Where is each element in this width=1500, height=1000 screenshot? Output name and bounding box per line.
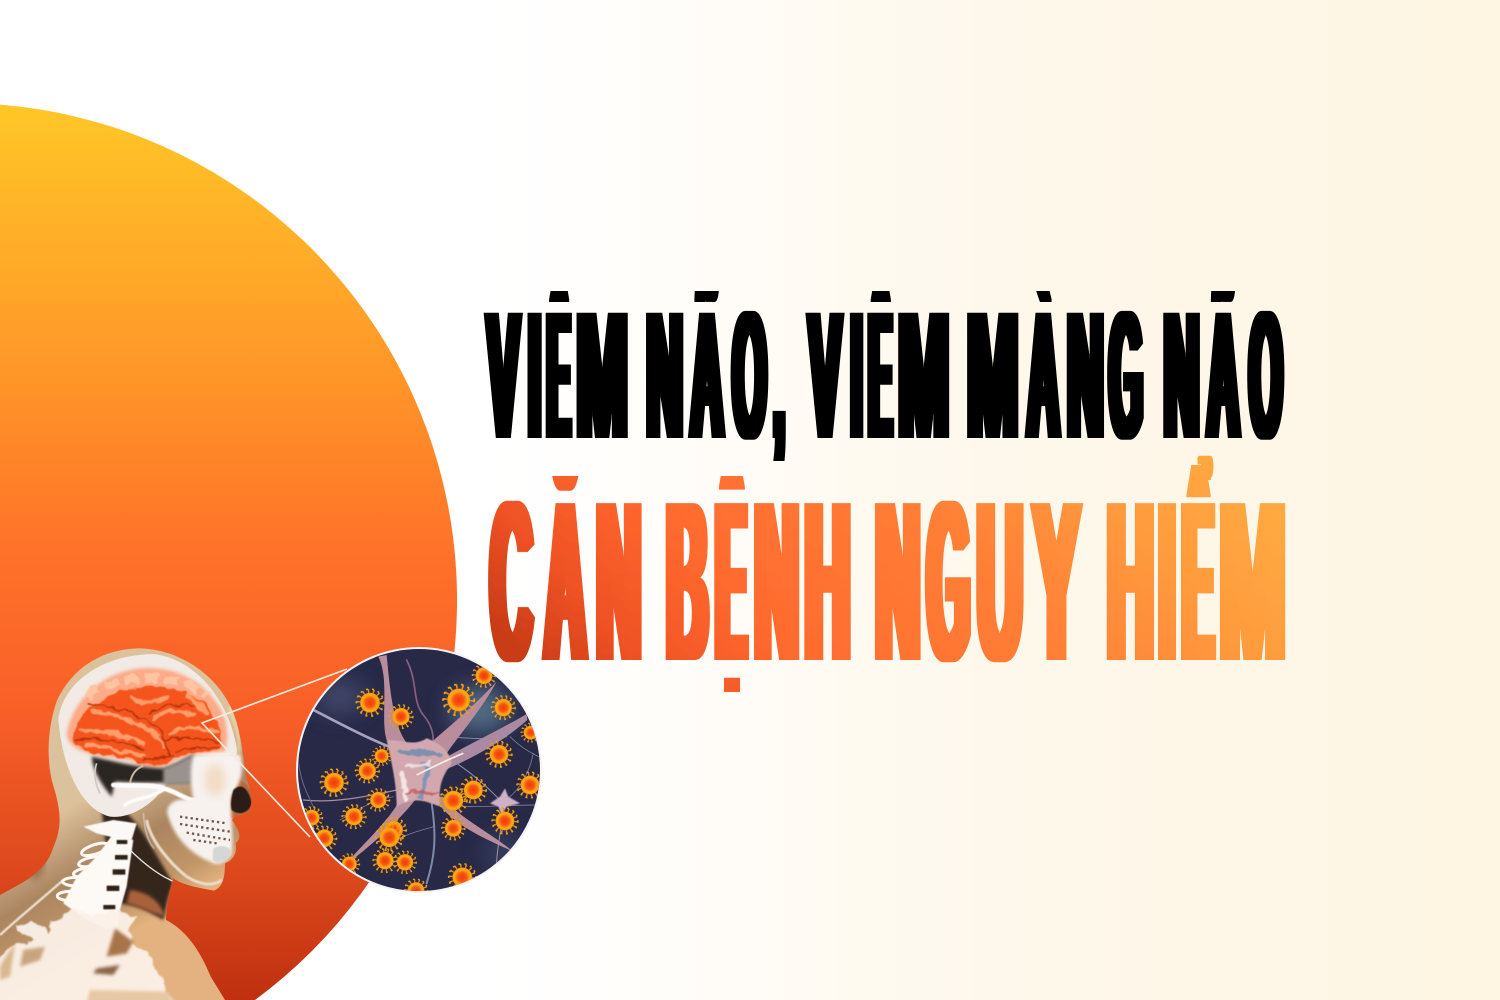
title line 1: black: M (967, 273, 1018, 477)
title line 2: orange gradient: Ă (545, 455, 586, 709)
lens field (298, 649, 540, 891)
title line 2: orange gradient: C (491, 455, 532, 709)
title line 1: black (484, 291, 1284, 461)
title line 1: black: Ê (547, 273, 570, 477)
spine top (83, 820, 137, 840)
title line 2: orange gradient: H (805, 455, 850, 709)
title line 1: black: O (733, 273, 766, 477)
cranium shell (58, 654, 237, 817)
nose (231, 786, 252, 813)
title line 2: orange gradient: N (755, 455, 798, 709)
title line 1: black: I (529, 273, 541, 477)
title line 1: black: N (647, 273, 683, 477)
brain pointer origin glow (230, 707, 239, 753)
skull face (167, 753, 242, 864)
lens rim (296, 647, 542, 893)
title line 2: orange gradient: Y (1033, 455, 1079, 709)
title line 2: orange gradient: B (667, 455, 708, 709)
pointer lines (202, 669, 347, 837)
title line 1: black: M (576, 273, 628, 477)
spine and shoulder bones (0, 820, 222, 1000)
title line 2: orange gradient (491, 455, 1286, 709)
title line 2: orange gradient: G (928, 455, 969, 709)
neuron body shading (400, 750, 440, 800)
title line 1: black: Ê (869, 273, 892, 477)
title line 1: black: Ã (1207, 273, 1239, 477)
neuron body (387, 738, 452, 807)
gaps between bones (107, 928, 133, 957)
neck and shoulder soft tissue (0, 797, 227, 1000)
title line 1: black: Ã (691, 273, 723, 477)
x-ray interior (0, 654, 254, 1000)
title line 1: black: G (1109, 273, 1142, 477)
jaw ridge (147, 820, 222, 884)
neuron arms (343, 655, 527, 867)
vertebra ring (57, 841, 110, 901)
title line 2: orange gradient: I (1159, 455, 1175, 709)
wire line (130, 850, 173, 882)
text: O (1250, 273, 1282, 477)
brain (67, 668, 227, 768)
shoulder blade and ribs (0, 910, 173, 1000)
nose skin (230, 780, 252, 818)
magnified lens: infected neuron (296, 647, 543, 902)
cavity below brain (92, 755, 195, 797)
eye socket tint (205, 764, 225, 796)
background glow (450, 687, 510, 733)
title line 2: orange gradient: H (1108, 455, 1153, 709)
head and shoulders silhouette (0, 648, 251, 1000)
neuron processes (298, 660, 538, 883)
zygomatic bones (113, 785, 193, 848)
head x-ray (58, 654, 254, 864)
virus particles (301, 664, 543, 902)
teeth (180, 817, 230, 843)
title line 1: black: , (774, 273, 784, 477)
title line 1: black: I (851, 273, 862, 477)
title line 1: black: N (1164, 273, 1199, 477)
bright nucleus arm (417, 753, 463, 775)
title line 1: black: N (1067, 273, 1103, 477)
title line 2: orange gradient: N (597, 455, 641, 709)
small neuron (490, 788, 520, 815)
vertebra gaps (103, 840, 128, 909)
jaw shadow (213, 846, 232, 862)
title line 2: orange gradient: N (876, 455, 920, 709)
text: M (1220, 455, 1286, 709)
title line 2: orange gradient: Ể (1183, 455, 1213, 709)
title line 2: orange gradient: U (978, 455, 1022, 709)
title line 2: orange gradient: Ệ (716, 455, 746, 709)
title line 1: black: V (487, 273, 519, 477)
title line 1: black: V (809, 273, 841, 477)
illustration: human head with skull and brain (0, 648, 347, 1000)
title line 1: black: À (1027, 273, 1059, 477)
spine column (62, 836, 134, 918)
title line 1: black: M (898, 273, 949, 477)
orange gradient circle (0, 105, 457, 1000)
